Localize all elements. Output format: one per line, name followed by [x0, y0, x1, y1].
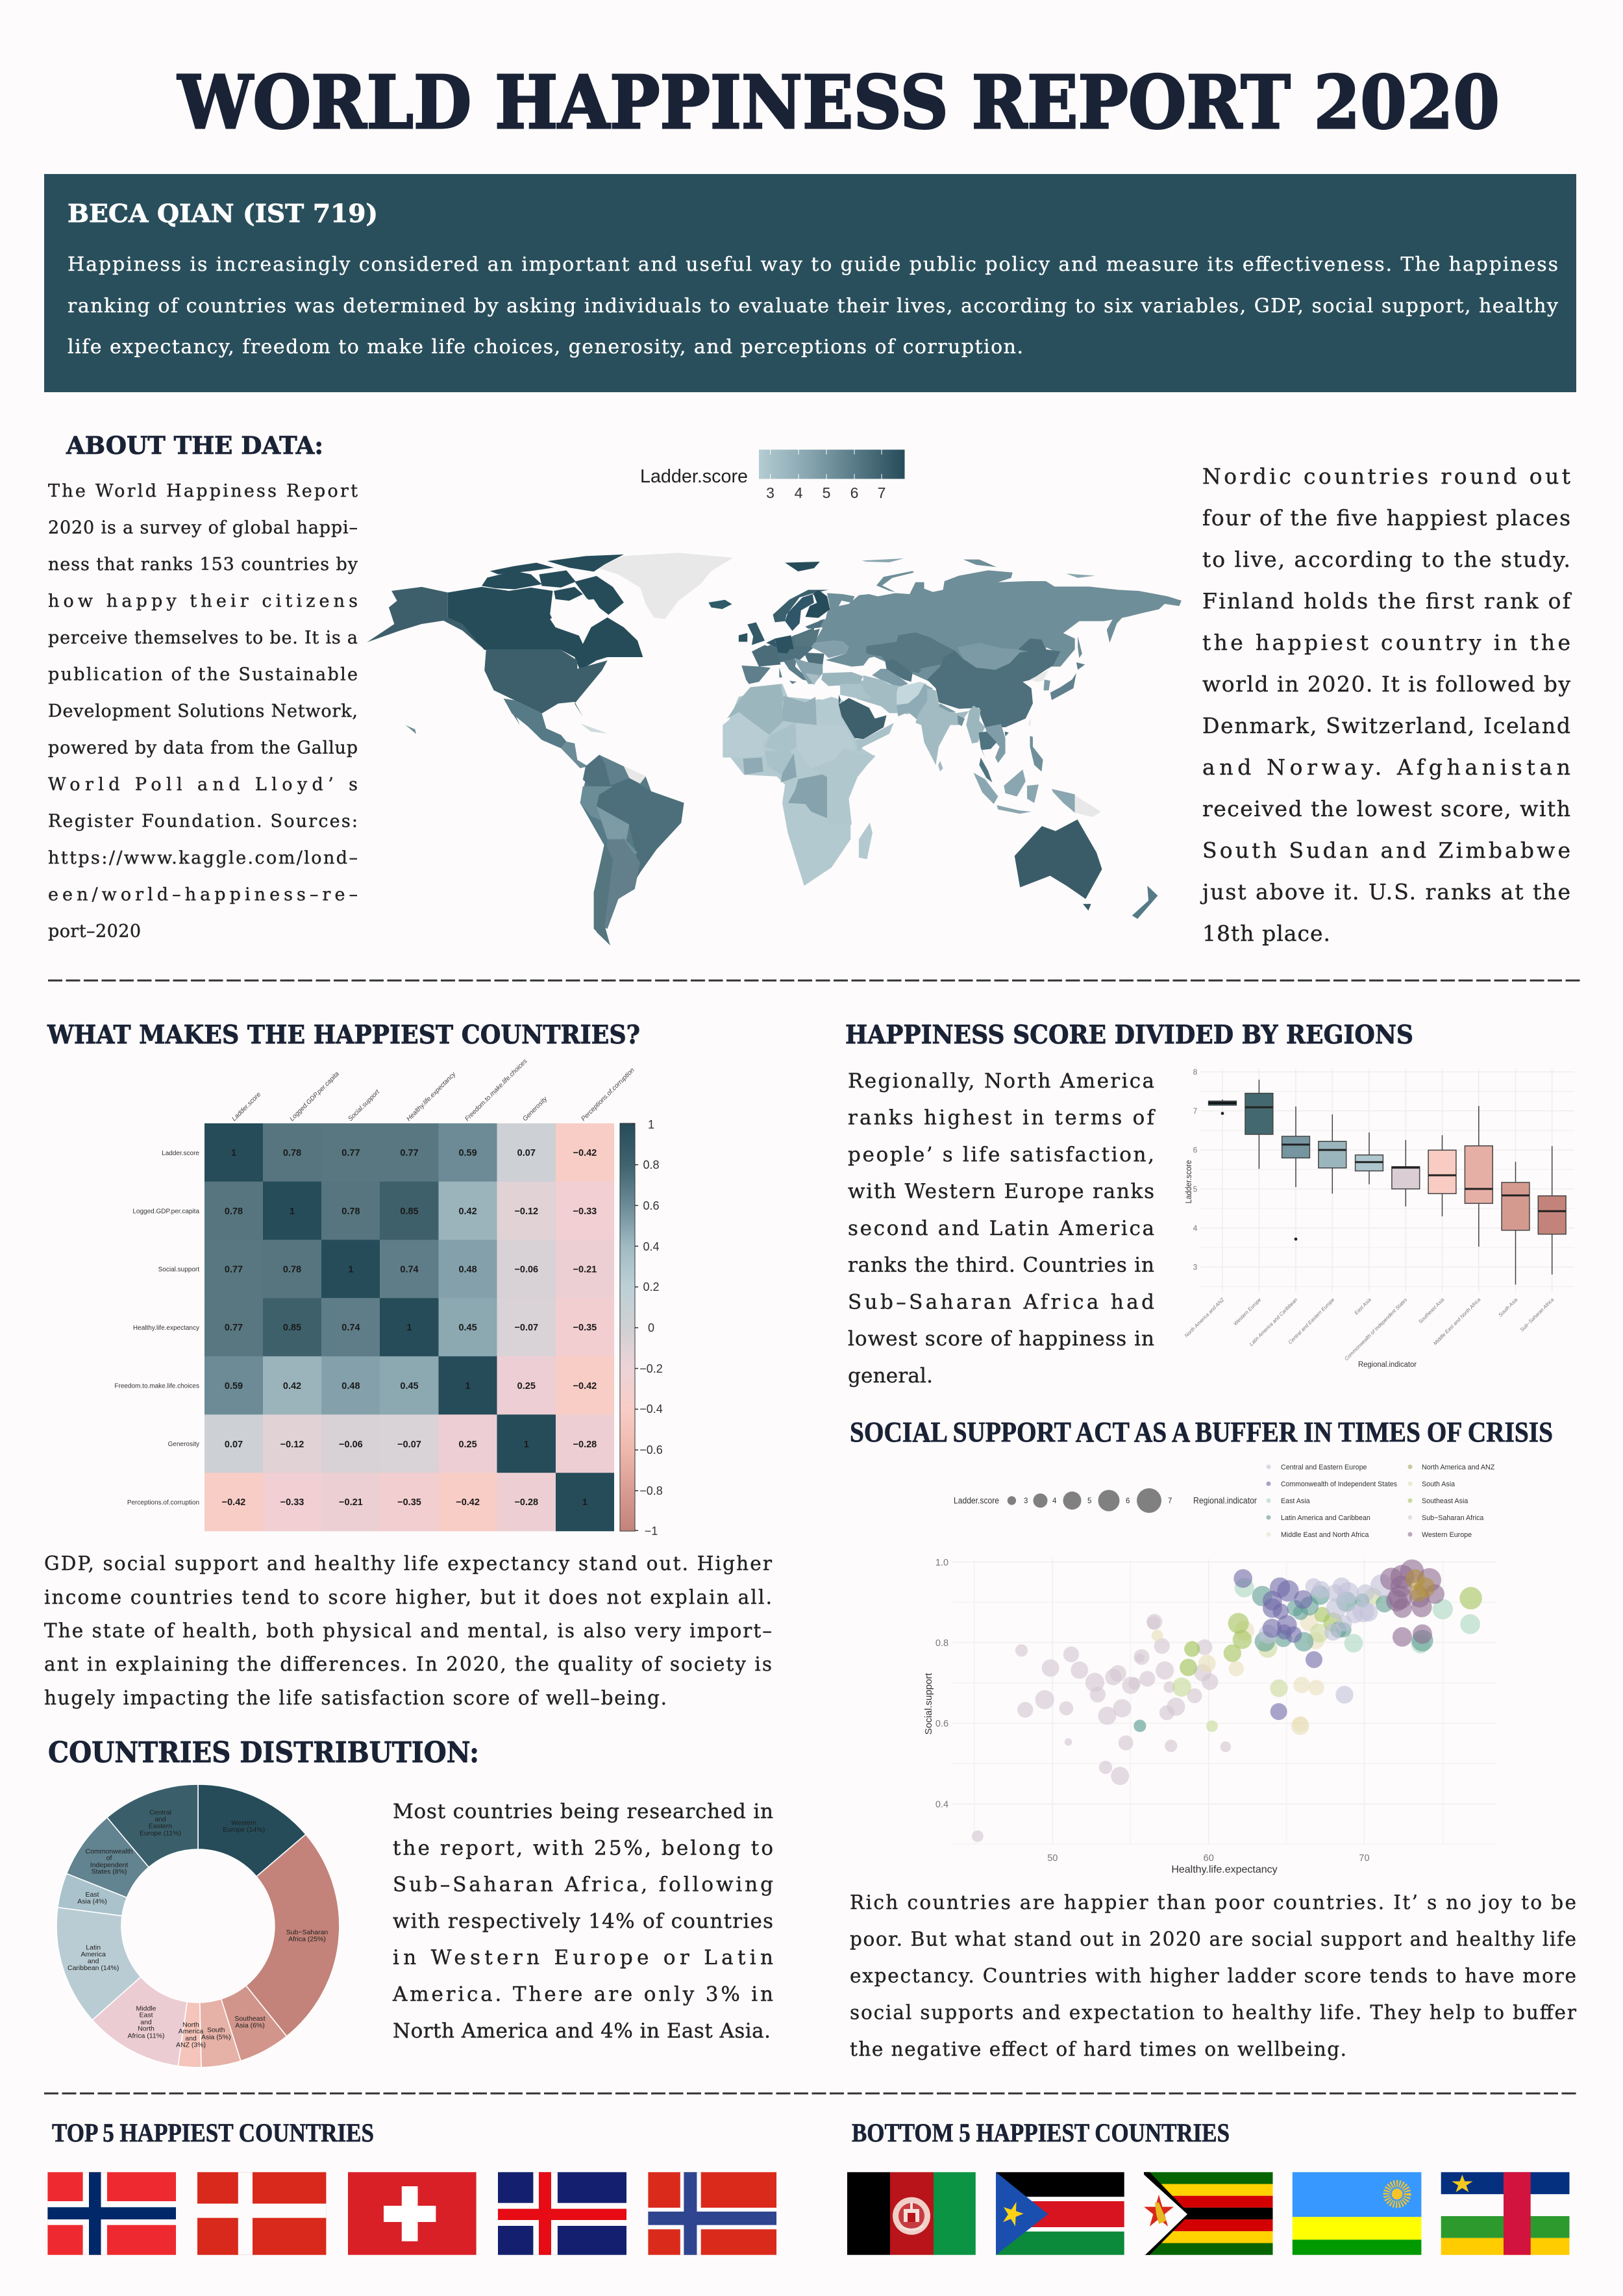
text block: what makes the happiest countries: GDP, social support and healthy life expectancy stand out. Higher — [44, 1553, 773, 1575]
donut labels: Western — [231, 1819, 256, 1827]
heatmap row labels — [114, 1150, 199, 1506]
bubbles: lower-left countries — [972, 1614, 1309, 1842]
legend: ladder score colour bar: 4 — [795, 484, 803, 501]
chart: donut of countries by region — [56, 1784, 340, 2067]
text block: about the data: Register Foundation. Sources: — [48, 812, 358, 831]
box: East Asia — [1356, 1132, 1383, 1184]
boxplot x axis: Western Europe — [1232, 1297, 1263, 1327]
heatmap values: −0.28 — [573, 1440, 597, 1450]
legend: regional indicator: East Asia — [1281, 1497, 1310, 1505]
heatmap row labels: Freedom.to.make.life.choices — [114, 1383, 199, 1390]
heatmap values: −0.06 — [514, 1265, 538, 1275]
text block: regions: ranks the third. Countries in — [848, 1254, 1154, 1277]
heatmap values: −0.07 — [397, 1440, 421, 1450]
text block: about the data: The World Happiness Report — [48, 481, 358, 501]
bubbles: Southeast Asia lower left — [1180, 1641, 1200, 1676]
bubbles: Sub-Saharan Africa — [972, 1614, 1231, 1842]
donut labels: and — [155, 1816, 166, 1823]
legend: ladder score colour bar: 6 — [850, 484, 858, 501]
text block: regions: with Western Europe ranks — [848, 1180, 1154, 1203]
heatmap values: −0.21 — [573, 1265, 597, 1275]
donut labels: Central — [149, 1809, 171, 1817]
heatmap colour scale: −0.2 — [639, 1362, 663, 1375]
map: Greenland — [597, 553, 733, 619]
donut labels: America — [179, 2028, 203, 2036]
text block: nordic countries: received the lowest score, with — [1202, 796, 1570, 821]
text block: nordic countries: Finland holds the first rank of — [1202, 588, 1572, 614]
text block: countries distribution: America. There are only 3% in — [392, 1983, 773, 2006]
box: Commonwealth of Independent States — [1392, 1140, 1420, 1206]
heatmap values: 0.78 — [225, 1206, 243, 1217]
legend: regional indicator: Central and Eastern Europe — [1281, 1464, 1367, 1471]
map: Africa countries — [723, 684, 875, 825]
heatmap values: 0.74 — [400, 1265, 419, 1275]
heatmap values: 0.78 — [341, 1206, 360, 1217]
heading: about the data: ABOUT THE DATA: — [66, 431, 323, 460]
cluster: Central and Eastern Europe — [1259, 1574, 1393, 1704]
legend: bubble size: 5 — [1087, 1497, 1091, 1505]
text block: countries distribution — [392, 1800, 773, 2043]
text block: nordic countries: South Sudan and Zimbabwe — [1202, 838, 1570, 863]
boxplot x axis: Middle East and North Africa — [1432, 1297, 1482, 1346]
text block: nordic countries: to live, according to the study. — [1202, 547, 1570, 572]
heatmap values: −0.35 — [397, 1497, 421, 1508]
box: Middle East and North Africa — [1465, 1106, 1493, 1247]
text block: nordic countries: the happiest country in the — [1202, 630, 1570, 655]
legend: ladder score colour bar: 7 — [878, 484, 886, 501]
heatmap values: 1 — [406, 1323, 412, 1333]
heatmap row labels: Logged.GDP.per.capita — [132, 1208, 199, 1216]
text block: nordic countries: four of the five happiest places — [1202, 505, 1570, 530]
heading: countries distribution: COUNTRIES DISTRIBUTION: — [48, 1736, 479, 1769]
heatmap values: 0.25 — [458, 1440, 477, 1450]
heatmap values: 0.48 — [458, 1265, 477, 1275]
legend: bubble size: 4 — [1052, 1497, 1057, 1505]
heatmap values: 0.59 — [225, 1381, 243, 1391]
donut labels: Asia (5%) — [201, 2033, 230, 2041]
text block: nordic countries: Nordic countries round out — [1202, 464, 1570, 489]
heatmap values: −0.35 — [573, 1323, 597, 1333]
heatmap column labels: Generosity — [521, 1095, 549, 1123]
text block: nordic countries: Denmark, Switzerland, Iceland — [1202, 713, 1570, 738]
donut labels: States (8%) — [92, 1868, 127, 1876]
text block: about the data: perceive themselves to be. It is a — [48, 628, 358, 648]
boxplot y axis: 5 — [1193, 1184, 1198, 1193]
flag: Iceland — [498, 2172, 626, 2255]
boxplot y axis: 7 — [1193, 1106, 1198, 1116]
cluster: Latin America — [1252, 1586, 1433, 1652]
box: Central and Eastern Europe — [1319, 1114, 1346, 1193]
donut labels: and — [88, 1958, 99, 1965]
heading: bottom 5: BOTTOM 5 HAPPIEST COUNTRIES — [852, 2118, 1230, 2147]
heatmap values — [222, 1148, 597, 1508]
map: East and Southeast Asia — [927, 638, 1101, 817]
heatmap values: 0.78 — [283, 1148, 301, 1158]
donut labels: and — [140, 2018, 152, 2026]
heatmap column labels: Social.support — [347, 1088, 382, 1123]
map: Oceania — [1015, 819, 1158, 919]
text block: regions: people’ s life satisfaction, — [848, 1143, 1154, 1166]
legend: regional indicator: Latin America and Caribbean — [1281, 1514, 1370, 1522]
text block: social support: poor. But what stand out in 2020 are social support and healthy life — [850, 1928, 1576, 1951]
donut labels: South — [207, 2027, 225, 2034]
map: Europe — [739, 562, 849, 685]
chart: bubble scatter social support vs life expectancy — [923, 1558, 1496, 1875]
heatmap colour scale: −1 — [645, 1525, 658, 1538]
heatmap colour scale: −0.8 — [639, 1484, 663, 1497]
legend: regional indicator: Southeast Asia — [1422, 1497, 1468, 1505]
donut labels: Sub−Saharan — [286, 1928, 328, 1936]
legend: regional indicator: Commonwealth of Independent States — [1281, 1480, 1397, 1488]
text block: countries distribution: Sub–Saharan Africa, following — [393, 1873, 773, 1897]
heatmap column labels: Healthy.life.expectancy — [405, 1070, 458, 1123]
text block: about the data: World Poll and Lloyd’ s — [48, 775, 358, 795]
donut labels: Independent — [90, 1861, 128, 1869]
heatmap values: 0.77 — [400, 1148, 419, 1158]
heatmap values: −0.33 — [573, 1206, 597, 1217]
legend: regional indicator: Regional.indicator — [1193, 1496, 1257, 1505]
cluster: Western Europe — [1380, 1560, 1444, 1647]
heatmap values: 0.77 — [225, 1323, 243, 1333]
boxplot y axis — [1183, 1067, 1198, 1271]
text block: nordic countries: 18th place. — [1202, 921, 1330, 946]
donut labels — [68, 1809, 328, 2049]
flag: Zimbabwe — [1144, 2172, 1272, 2255]
text block: what makes the happiest countries: The state of health, both physical and mental, is also very import– — [44, 1619, 772, 1641]
flag: Afghanistan — [847, 2172, 976, 2255]
chart: correlation heatmap — [114, 1058, 663, 1538]
donut labels: North — [138, 2025, 155, 2033]
boxplot x axis: South Asia — [1498, 1297, 1519, 1318]
text block: about the data: Development Solutions Network, — [48, 701, 358, 721]
boxplot x axis: East Asia — [1354, 1297, 1372, 1316]
heatmap values: 1 — [348, 1265, 353, 1275]
donut labels: Asia (4%) — [77, 1897, 107, 1905]
legend: bubble size: 3 — [1024, 1497, 1028, 1505]
legend: ladder score colour bar: 3 — [766, 484, 774, 501]
boxplot x axis: Sub−Saharan Africa — [1519, 1297, 1555, 1333]
heatmap values: −0.12 — [280, 1440, 304, 1450]
title: WORLD HAPPINESS REPORT 2020 — [177, 60, 1500, 145]
heatmap colour scale: 0.4 — [643, 1240, 660, 1253]
heatmap values: 1 — [290, 1206, 295, 1217]
boxplot y axis: 8 — [1193, 1067, 1198, 1077]
heatmap values: 0.07 — [517, 1148, 536, 1158]
boxplot x axis: North America and ANZ — [1183, 1297, 1226, 1339]
bubble chart axes: 1.0 — [935, 1558, 948, 1568]
legend: bubble size — [954, 1488, 1172, 1513]
text block: countries distribution: North America and 4% in East Asia. — [393, 2019, 771, 2043]
boxplot x axis: Central and Eastern Europe — [1287, 1297, 1336, 1345]
map: Middle East and South Asia — [821, 672, 969, 771]
legend: ladder score colour bar — [640, 449, 905, 501]
heatmap colour scale: 0 — [648, 1321, 654, 1334]
donut labels: of — [106, 1854, 112, 1862]
donut labels: ANZ (3%) — [176, 2041, 206, 2049]
heatmap colour scale: 0.8 — [643, 1158, 660, 1171]
text block: social support: expectancy. Countries with higher ladder score tends to have more — [850, 1965, 1576, 1987]
text block: countries distribution: in Western Europe or Latin — [393, 1946, 773, 1969]
boxplot y axis: Ladder.score — [1183, 1160, 1193, 1204]
heatmap values: 0.45 — [400, 1381, 419, 1391]
donut labels: Middle — [136, 2004, 156, 2012]
heatmap values: 1 — [582, 1497, 588, 1508]
heatmap row labels: Social.support — [158, 1266, 199, 1273]
author heading: BECA QIAN (IST 719) — [68, 199, 378, 228]
heatmap colour scale: 0.2 — [643, 1280, 660, 1293]
text block: about the data: ness that ranks 153 countries by — [48, 555, 358, 575]
text block: social support: social supports and expectation to healthy life. They help to buffer — [850, 2001, 1577, 2023]
intro text: ranking of countries was determined by asking individuals to evaluate their lives, according to six variables, GDP, social support, healthy — [68, 295, 1558, 318]
text block: about the data: https://www.kaggle.com/lond– — [48, 848, 358, 868]
donut labels: Southeast — [234, 2015, 266, 2023]
heading: social support: SOCIAL SUPPORT ACT AS A BUFFER IN TIMES OF CRISIS — [850, 1416, 1553, 1448]
box: Latin America and Caribbean — [1282, 1106, 1309, 1241]
boxplot x axis: Latin America and Caribbean — [1248, 1297, 1298, 1347]
bubble: Latin America lower left — [1134, 1719, 1146, 1732]
donut labels: North — [182, 2021, 199, 2028]
heatmap colour scale: −0.4 — [639, 1403, 663, 1416]
cluster: Middle East and North Africa — [1229, 1613, 1324, 1732]
panel: introduction banner — [44, 174, 1576, 392]
donut labels: Caribbean (14%) — [68, 1964, 119, 1972]
heatmap column labels: Perceptions.of.corruption — [580, 1066, 636, 1123]
heading: happiness score divided by regions: HAPPINESS SCORE DIVIDED BY REGIONS — [845, 1020, 1413, 1050]
heatmap values: −0.07 — [514, 1323, 538, 1333]
text block: about the data — [48, 481, 358, 942]
flag: Rwanda — [1293, 2172, 1421, 2255]
heatmap colour scale: 1 — [648, 1118, 654, 1131]
donut labels: Asia (6%) — [235, 2021, 265, 2029]
heatmap values: −0.12 — [514, 1206, 538, 1217]
text block: regions: second and Latin America — [848, 1217, 1154, 1240]
cluster: Southeast Asia — [1224, 1587, 1482, 1662]
text block: about the data: powered by data from the Gallup — [48, 738, 358, 758]
intro text: Happiness is increasingly considered an important and useful way to guide public policy and measure its effectiveness. The happiness — [68, 253, 1558, 276]
text block: regions: Regionally, North America — [848, 1069, 1154, 1093]
cluster: Commonwealth of Independent States — [1233, 1569, 1322, 1720]
heading: what makes the happiest countries: WHAT MAKES THE HAPPIEST COUNTRIES? — [47, 1020, 640, 1050]
heatmap row labels: Perceptions.of.corruption — [127, 1499, 199, 1506]
legend: ladder score colour bar: Ladder.score — [640, 466, 748, 487]
bubble chart axes: 0.6 — [935, 1719, 948, 1729]
text block: what makes the happiest countries: ant in explaining the differences. In 2020, the quality of society is — [44, 1653, 772, 1675]
text block: what makes the happiest countries: income countries tend to score higher, but it does not explain all. — [44, 1586, 772, 1608]
legend: bubble size: 6 — [1126, 1497, 1130, 1505]
flag: Norway — [47, 2172, 176, 2255]
heatmap values: −0.42 — [222, 1497, 245, 1508]
donut labels: Europe (11%) — [140, 1829, 181, 1837]
legend: regional indicator: Western Europe — [1422, 1531, 1472, 1539]
text block: regions: ranks highest in terms of — [848, 1106, 1156, 1130]
heatmap colour scale: 0.6 — [643, 1199, 660, 1212]
donut labels: and — [185, 2034, 197, 2042]
text block: nordic countries — [1200, 464, 1572, 946]
text block: about the data: een/world–happiness–re– — [48, 884, 358, 905]
bubbles: upper-right cluster — [1224, 1560, 1482, 1732]
cluster: East Asia — [1235, 1578, 1480, 1653]
heatmap values: −0.21 — [339, 1497, 363, 1508]
map: North America — [367, 555, 643, 768]
bubbles: Middle East and South Asia lower left — [1152, 1630, 1309, 1735]
boxplot y axis: 4 — [1193, 1223, 1198, 1232]
heatmap values: 1 — [465, 1381, 471, 1391]
text block: social support — [850, 1891, 1577, 2060]
heatmap column labels: Freedom.to.make.life.choices — [464, 1058, 528, 1123]
donut labels: Europe (14%) — [223, 1826, 265, 1834]
heatmap cells — [204, 1123, 614, 1531]
box: Western Europe — [1245, 1080, 1273, 1169]
donut labels: America — [81, 1951, 106, 1958]
donut labels: Eastern — [149, 1823, 172, 1830]
text block: what makes the happiest countries: hugely impacting the life satisfaction score of well–being. — [44, 1687, 667, 1709]
flag: South Sudan — [996, 2172, 1124, 2255]
text block: nordic countries: just above it. U.S. ranks at the — [1200, 879, 1570, 905]
intro text — [68, 253, 1558, 358]
heading: top 5: TOP 5 HAPPIEST COUNTRIES — [52, 2118, 374, 2147]
text block: regions: lowest score of happiness in — [848, 1327, 1154, 1351]
legend: regional indicator: North America and ANZ — [1422, 1464, 1495, 1471]
text block: regions: Sub–Saharan Africa had — [848, 1291, 1154, 1314]
heatmap values: 0.07 — [225, 1440, 243, 1450]
heatmap values: 0.85 — [400, 1206, 419, 1217]
text block: social support: Rich countries are happier than poor countries. It’ s no joy to be — [850, 1891, 1576, 1914]
heatmap values: 1 — [231, 1148, 236, 1158]
legend: regional indicator: Sub−Saharan Africa — [1422, 1514, 1483, 1522]
boxplot y axis: 3 — [1193, 1262, 1198, 1271]
text block: about the data: publication of the Sustainable — [48, 665, 358, 684]
heatmap values: −0.42 — [573, 1148, 597, 1158]
text block: regions: general. — [848, 1364, 933, 1388]
bubble chart axes — [923, 1558, 1370, 1875]
heatmap values: 0.59 — [458, 1148, 477, 1158]
flag: Switzerland — [348, 2172, 477, 2255]
flag: Central African Republic — [1441, 2172, 1570, 2255]
heatmap values: −0.33 — [280, 1497, 304, 1508]
bubble chart axes: 0.4 — [935, 1800, 948, 1810]
boxplot x axis: Southeast Asia — [1417, 1297, 1446, 1325]
heatmap values: 0.48 — [341, 1381, 360, 1391]
heatmap colour scale: −0.6 — [639, 1443, 663, 1456]
legend: ladder score colour bar: 5 — [823, 484, 830, 501]
text block: countries distribution: the report, with 25%, belong to — [393, 1836, 773, 1860]
cluster: North America and ANZ — [1406, 1569, 1435, 1602]
boxplot y axis: 6 — [1193, 1145, 1198, 1154]
legend: regional indicator: Middle East and North Africa — [1281, 1531, 1369, 1539]
donut labels: Africa (25%) — [288, 1935, 326, 1943]
donut labels: Commonwealth — [86, 1847, 133, 1855]
heatmap values: 0.74 — [341, 1323, 360, 1333]
heatmap values: −0.42 — [456, 1497, 480, 1508]
legend: bubble size: 7 — [1168, 1497, 1172, 1505]
text block: what makes the happiest countries — [44, 1553, 773, 1709]
text block: nordic countries: world in 2020. It is followed by — [1202, 671, 1570, 697]
legend: bubble size: Ladder.score — [954, 1496, 999, 1505]
flag: Denmark — [197, 2172, 326, 2255]
box: Southeast Asia — [1428, 1135, 1456, 1216]
text block: regions — [848, 1069, 1156, 1388]
heatmap values: −0.42 — [573, 1381, 597, 1391]
map: South America — [580, 755, 684, 945]
intro text: life expectancy, freedom to make life choices, generosity, and perceptions of corruption. — [68, 336, 1023, 358]
flag: fifth happiest country — [648, 2172, 776, 2255]
bubble chart axes: 50 — [1047, 1853, 1058, 1864]
heatmap values: −0.28 — [514, 1497, 538, 1508]
heatmap values: 1 — [524, 1440, 529, 1450]
chart: world map of ladder score — [367, 553, 1182, 945]
boxplot x axis — [1183, 1297, 1555, 1369]
bubble chart axes: Social.support — [923, 1673, 934, 1735]
bubble chart axes: Healthy.life.expectancy — [1171, 1864, 1278, 1875]
donut labels: East — [139, 2012, 153, 2019]
text block: nordic countries: and Norway. Afghanistan — [1202, 755, 1570, 780]
heatmap row labels: Ladder.score — [162, 1150, 199, 1157]
heatmap row labels: Healthy.life.expectancy — [133, 1325, 199, 1332]
text block: about the data: port–2020 — [48, 921, 141, 942]
heatmap column labels: Logged.GDP.per.capita — [288, 1070, 341, 1123]
text block: about the data: how happy their citizens — [48, 591, 358, 612]
heatmap values: −0.06 — [339, 1440, 363, 1450]
bubbles: South Asia lower left — [1172, 1678, 1218, 1732]
bubble chart axes: 60 — [1204, 1853, 1214, 1864]
box: North America and ANZ — [1209, 1099, 1236, 1115]
heatmap column labels — [230, 1058, 636, 1123]
text block: about the data: 2020 is a survey of global happi– — [48, 518, 358, 538]
chart: boxplot of ladder score by region — [1183, 1067, 1574, 1369]
map: Russia and Central Asia — [814, 558, 1182, 687]
heatmap column labels: Ladder.score — [230, 1091, 262, 1123]
heatmap values: 0.85 — [283, 1323, 301, 1333]
bubble chart axes: 70 — [1359, 1853, 1370, 1864]
map: Iceland — [708, 600, 732, 609]
heatmap values: 0.77 — [341, 1148, 360, 1158]
cluster: South Asia — [1258, 1588, 1381, 1697]
legend: regional indicator: South Asia — [1422, 1480, 1455, 1488]
legend: regional indicator — [1193, 1464, 1495, 1539]
boxplot x axis: Regional.indicator — [1358, 1361, 1417, 1369]
donut labels: East — [85, 1891, 99, 1899]
heatmap values: 0.42 — [283, 1381, 301, 1391]
donut labels: Africa (11%) — [127, 2032, 165, 2040]
heatmap values: 0.78 — [283, 1265, 301, 1275]
box: South Asia — [1502, 1162, 1530, 1284]
heatmap colour scale — [620, 1118, 663, 1538]
text block: social support: the negative effect of hard times on wellbeing. — [850, 2038, 1346, 2060]
heatmap row labels: Generosity — [168, 1441, 199, 1448]
bubble chart axes: 0.8 — [935, 1638, 948, 1649]
boxplot x axis: Commonwealth of Independent States — [1343, 1297, 1408, 1362]
donut labels: Latin — [86, 1944, 101, 1952]
heatmap values: 0.77 — [225, 1265, 243, 1275]
box: Sub-Saharan Africa — [1538, 1146, 1566, 1275]
heatmap values: 0.42 — [458, 1206, 477, 1217]
heatmap values: 0.25 — [517, 1381, 536, 1391]
text block: countries distribution: Most countries being researched in — [393, 1800, 773, 1823]
heatmap values: 0.45 — [458, 1323, 477, 1333]
text block: countries distribution: with respectively 14% of countries — [393, 1910, 773, 1933]
map: Africa base — [723, 684, 875, 886]
